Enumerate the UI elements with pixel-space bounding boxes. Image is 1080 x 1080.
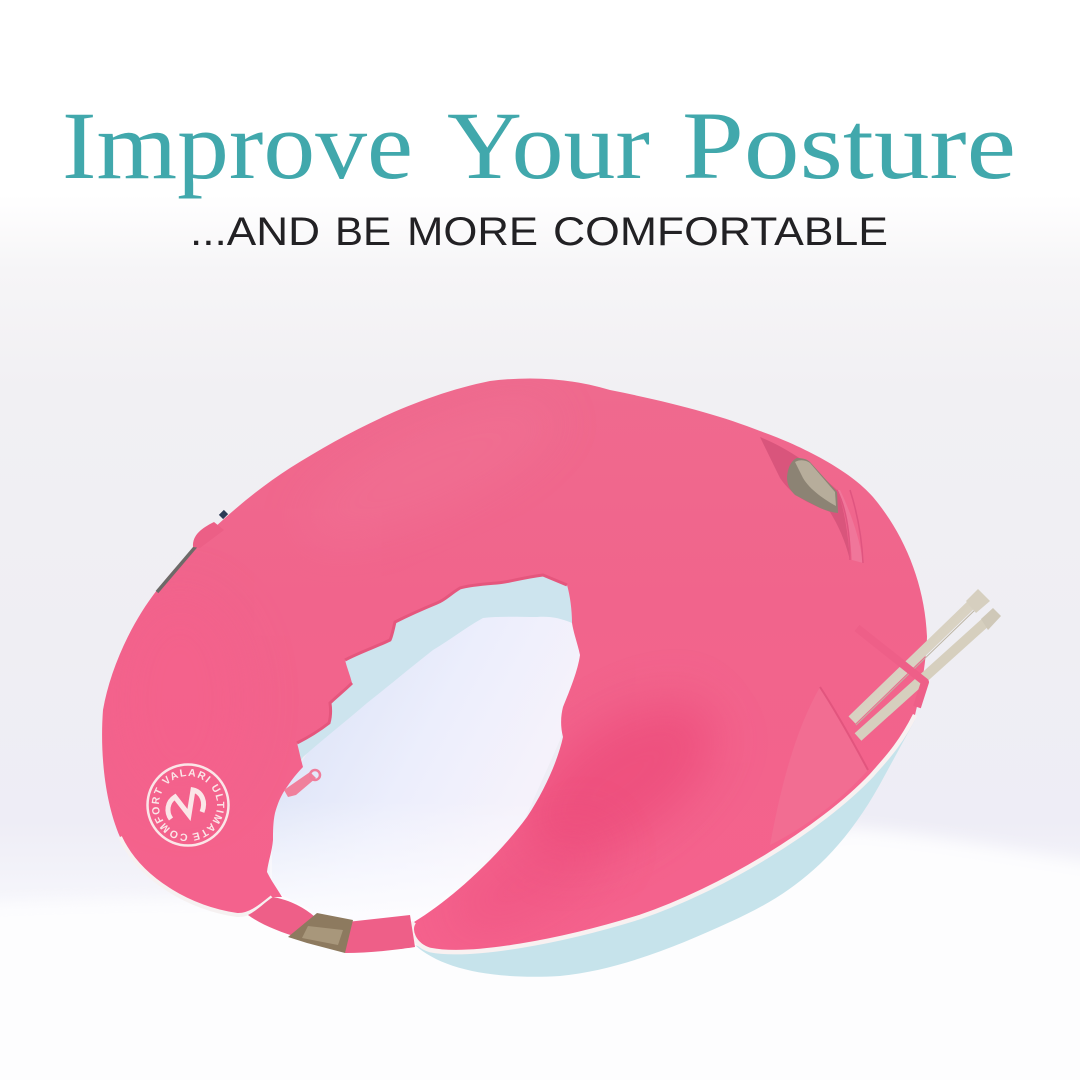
top pocket with device bbox=[760, 437, 863, 563]
subtitle: BE bbox=[335, 210, 391, 254]
front needle pocket bbox=[770, 687, 868, 845]
white piping left bbox=[120, 837, 272, 915]
title: Your bbox=[447, 92, 650, 199]
subtitle: MORE bbox=[407, 210, 538, 254]
pink body bbox=[102, 378, 927, 952]
pillow bbox=[102, 378, 1001, 977]
right elastic strap bbox=[345, 915, 415, 953]
zipper pull bbox=[284, 770, 320, 797]
hollow fade to white sheet bbox=[265, 800, 560, 925]
logo badge: COMFORT VALARI ULTIMATE bbox=[152, 769, 224, 841]
fabric shading bbox=[112, 582, 926, 953]
buckle bbox=[288, 913, 353, 953]
subtitle: ...AND bbox=[190, 210, 320, 254]
strap and buckle bbox=[248, 897, 415, 953]
zipper seam bbox=[297, 575, 567, 743]
left side tag bbox=[157, 512, 226, 592]
title: Improve bbox=[62, 92, 413, 199]
elastic loop bbox=[857, 628, 925, 707]
title bbox=[62, 92, 1016, 199]
white piping right bbox=[412, 715, 915, 952]
inner hollow surface bbox=[272, 610, 585, 925]
left elastic strap bbox=[248, 897, 315, 938]
knitting needles bbox=[852, 589, 1001, 737]
light-blue underside bbox=[275, 570, 572, 807]
light-blue bottom edge bbox=[415, 720, 915, 977]
subtitle: COMFORTABLE bbox=[553, 210, 888, 254]
title: Posture bbox=[682, 92, 1016, 199]
subtitle bbox=[190, 210, 888, 254]
